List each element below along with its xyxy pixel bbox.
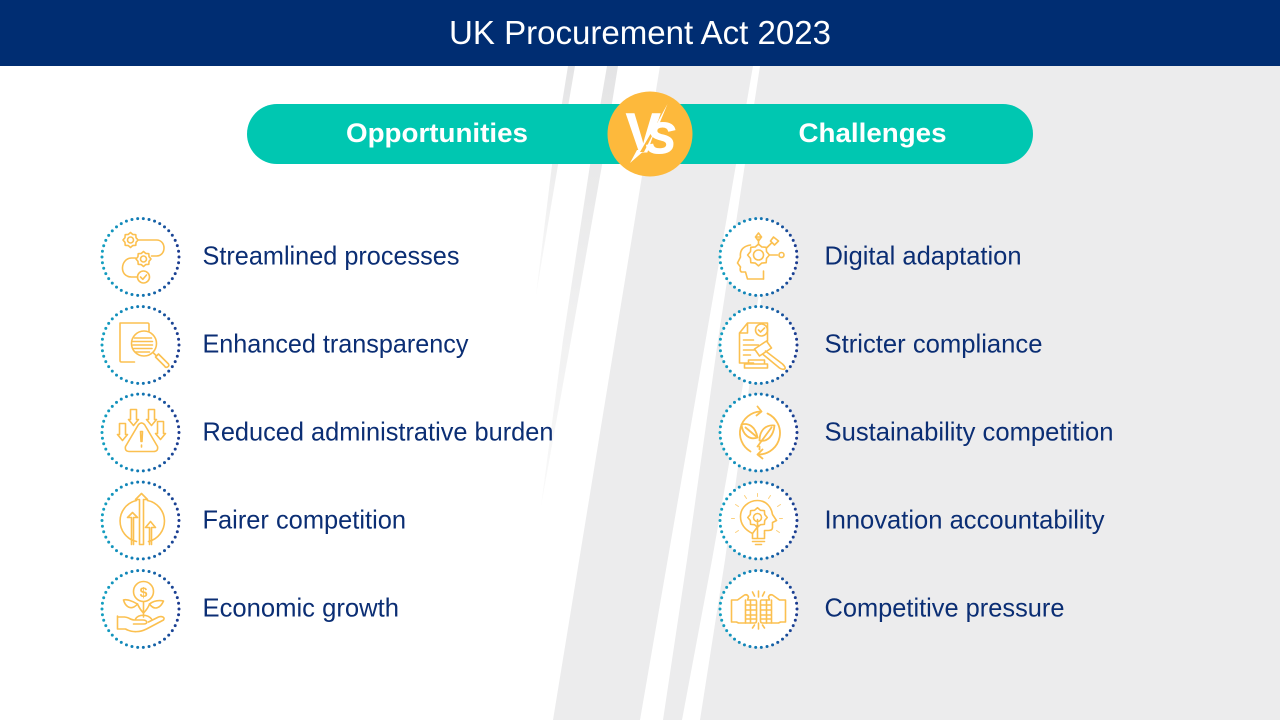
row: Streamlined processes: [102, 218, 460, 296]
label: Economic growth: [202, 594, 399, 622]
label: Enhanced transparency: [202, 330, 469, 358]
row: Fairer competition: [102, 482, 406, 559]
VS badge: S: [646, 114, 675, 163]
title: UK Procurement Act 2023: [449, 14, 831, 51]
icon: contract with gavel: [720, 306, 797, 384]
banner pill: [247, 104, 1033, 164]
versus banner: [247, 92, 1033, 176]
row: Reduced administrative burden: [102, 394, 554, 471]
heading: Opportunities: Opportunities: [346, 118, 528, 148]
header bar: [0, 0, 1280, 66]
label: Streamlined processes: [202, 242, 460, 270]
icon: hand with plant and coin: [102, 570, 179, 648]
label: Stricter compliance: [824, 330, 1042, 358]
row: Innovation accountability: [720, 482, 1105, 559]
label: Innovation accountability: [824, 506, 1105, 534]
row: Digital adaptation: [720, 218, 1022, 296]
background: diagonal grey stripes: [536, 66, 1280, 720]
icon: circle with rising arrows: [102, 482, 179, 559]
row: Enhanced transparency: [102, 306, 469, 384]
label: Fairer competition: [202, 506, 406, 534]
row: Economic growth: [102, 570, 399, 648]
icon: head with gear and arrows: [720, 218, 797, 296]
row: Sustainability competition: [720, 394, 1114, 471]
icon: bulb head with gear: [720, 482, 797, 559]
label: Competitive pressure: [824, 594, 1064, 622]
VS badge: V: [626, 102, 660, 164]
icon: hand with plant and coin: $: [140, 584, 148, 600]
icon: warning triangle with down arrows: [102, 394, 179, 471]
row: Stricter compliance: [720, 306, 1042, 384]
icon: document with magnifier: [102, 306, 179, 384]
label: Reduced administrative burden: [202, 418, 554, 446]
icon: process flow gears: [102, 218, 179, 296]
icon: leaves in cycle arrows: [720, 394, 797, 471]
label: Digital adaptation: [824, 242, 1022, 270]
label: Sustainability competition: [824, 418, 1114, 446]
row: Competitive pressure: [720, 570, 1064, 648]
heading: Challenges: Challenges: [798, 118, 946, 148]
icon: opposing fists: [720, 570, 797, 648]
VS badge: [608, 92, 692, 176]
